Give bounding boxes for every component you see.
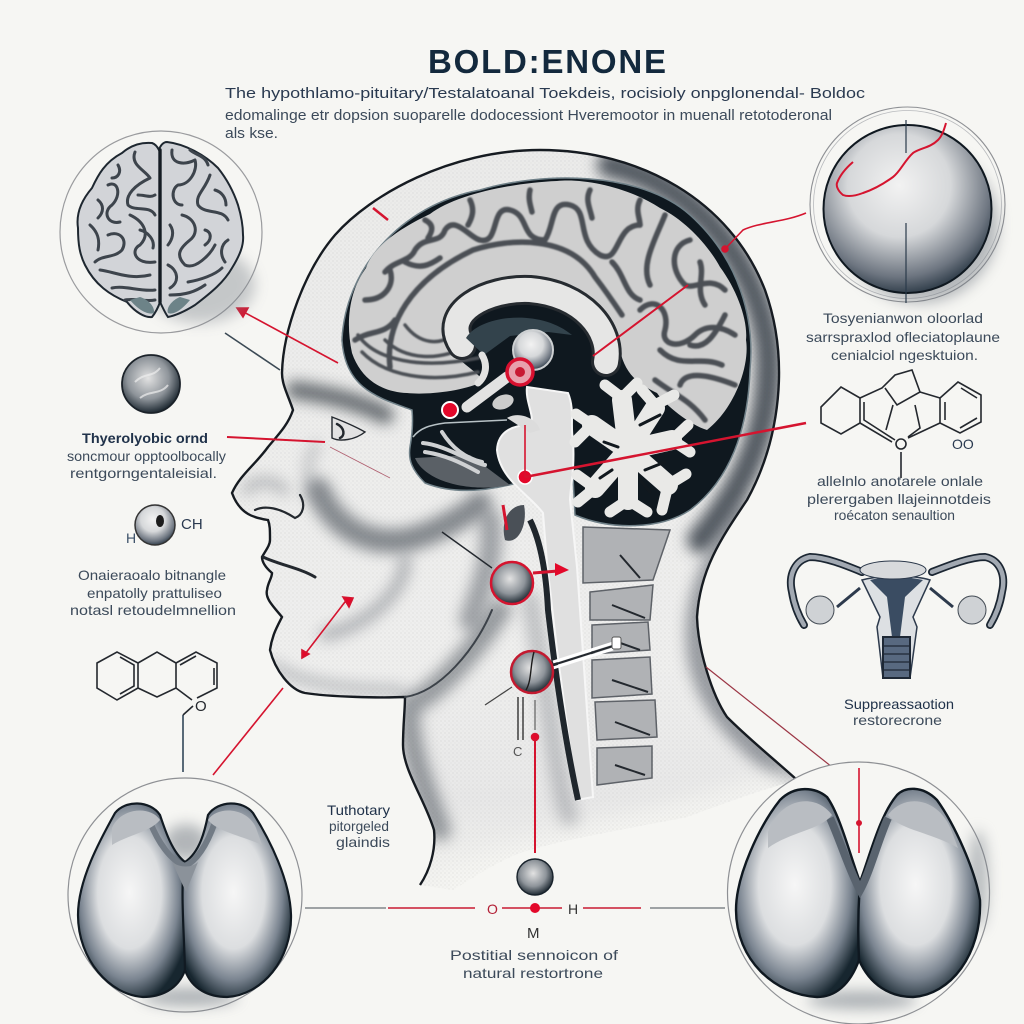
head outline — [232, 150, 797, 885]
left text block one: Thyerolyobic ornd — [82, 430, 208, 446]
right text block three: restorecrone — [853, 712, 942, 728]
left text block two: enpatolly prattuliseo — [87, 585, 222, 601]
facial features — [255, 417, 492, 697]
left text block one: soncmour opptoolbocally — [67, 448, 226, 464]
icon: small molecule ball: CH — [181, 516, 203, 533]
right text block one: sarrspraxlod ofleciatoplaune — [806, 329, 1000, 345]
ovaries — [806, 596, 834, 624]
molecule left — [97, 652, 217, 715]
right text block two: allelnlo anotarele onlale — [817, 473, 983, 489]
ring — [814, 110, 1002, 298]
bottom text block: Postitial sennoicon of — [450, 947, 618, 963]
top folds — [830, 818, 888, 890]
neck gland lower — [485, 637, 621, 740]
pituitary label: Tuthotary — [327, 802, 390, 818]
right text block two — [807, 473, 991, 523]
right text block three: Suppreassaotion — [844, 696, 954, 712]
sphere — [824, 125, 992, 293]
neck gland upper — [442, 532, 569, 604]
uterus body — [862, 576, 930, 678]
hypothalamus marker — [507, 359, 533, 385]
molecule right — [821, 370, 981, 478]
shadow — [145, 247, 255, 323]
head silhouette — [232, 150, 797, 890]
panel: lower-right gland circle — [728, 762, 990, 1024]
sulci — [355, 190, 735, 420]
left text block one: rentgorngentaleisial. — [70, 465, 217, 481]
right text block two: plerergaben llajeinnotdeis — [807, 491, 991, 507]
icon: reproductive organ — [791, 557, 1003, 678]
brainstem marker — [518, 470, 532, 484]
right lobe — [858, 789, 980, 997]
right text block two: roécaton senaultion — [834, 507, 955, 523]
left text block one — [67, 430, 226, 481]
right text block three — [844, 696, 954, 728]
spine block and vertebrae — [583, 527, 670, 785]
right text block one — [806, 310, 1000, 363]
right lobe — [183, 803, 291, 997]
pituitary label — [327, 802, 390, 850]
bottom text block: natural restortrone — [463, 965, 603, 981]
left lobe — [78, 803, 187, 997]
head shading — [246, 165, 790, 885]
left lobe — [736, 789, 861, 997]
left text block two: notasl retoudelmnellion — [70, 602, 236, 618]
optic tract — [467, 377, 507, 407]
shadow — [807, 991, 917, 1009]
top folds — [150, 822, 215, 866]
O-H bond diagram — [305, 901, 725, 942]
head illustration — [232, 150, 797, 890]
right text block one: cenialciol ngesktuion. — [831, 347, 978, 363]
brain — [78, 142, 243, 317]
thalamus — [513, 330, 553, 370]
cranial cavity — [342, 178, 751, 526]
intro text block: als kse. — [225, 125, 278, 142]
panel: lower-left gland circle — [68, 778, 302, 1012]
panel: brain circle — [60, 131, 262, 333]
cerebrum — [349, 180, 747, 430]
letter C label: C — [513, 744, 522, 759]
O-H bond diagram: M — [527, 925, 540, 942]
brainstem — [497, 387, 593, 800]
shadow — [164, 824, 208, 860]
throat dark stripe — [530, 520, 578, 800]
pituitary marker — [442, 402, 458, 418]
molecule right: OO — [952, 436, 974, 452]
nasal structures — [415, 432, 510, 488]
title: BOLD:ENONE — [428, 43, 666, 80]
O-H bond diagram: O — [487, 901, 498, 917]
cerebellum — [575, 383, 690, 512]
intro text block — [225, 85, 866, 142]
intro text block: edomalinge etr dopsion suoparelle dodocessiont Hveremootor in muenall retotoderonal — [225, 107, 832, 124]
callout arrows — [183, 208, 832, 853]
icon: small molecule ball — [126, 505, 203, 546]
panel: sphere circle — [810, 107, 1005, 303]
tubes — [791, 557, 1003, 625]
O-H bond diagram: H — [568, 901, 578, 917]
left text block two — [70, 567, 236, 618]
intro text block: The hypothlamo-pituitary/Testalatoanal Toekdeis, rocisioly onpglonendal- Boldoc — [225, 85, 866, 102]
molecule left: O — [195, 698, 207, 715]
bottom molecule ball — [517, 859, 553, 895]
pituitary label: pitorgeled — [329, 818, 389, 834]
icon: small molecule ball: H — [126, 530, 136, 546]
pituitary label: glaindis — [336, 834, 390, 850]
left text block two: Onaieraoalo bitnangle — [78, 567, 226, 583]
stipple overlay — [232, 150, 797, 890]
shadow — [842, 147, 998, 303]
bottom text block — [450, 947, 618, 981]
icon: small textured ball — [122, 355, 180, 413]
red pointer — [856, 768, 862, 853]
corpus callosum — [456, 290, 607, 383]
right text block one: Tosyenianwon oloorlad — [823, 310, 983, 326]
